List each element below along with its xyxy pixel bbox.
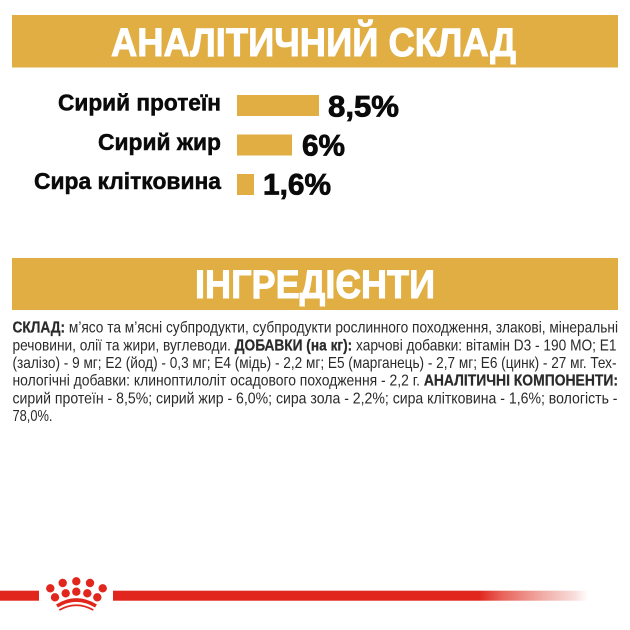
row: crude protein: 8,5%	[328, 90, 399, 124]
text block: ingredients list	[12, 320, 618, 425]
row: crude protein: Сирий протеїн	[58, 90, 221, 116]
title: analytical composition: АНАЛІТИЧНИЙ СКЛАД	[111, 19, 516, 65]
row: crude fibre: 1,6%	[263, 168, 331, 202]
title: ingredients: ІНГРЕДІЄНТИ	[195, 263, 435, 307]
text block: ingredients list: 78,0%.	[12, 408, 52, 425]
panel: analytical composition header	[12, 15, 618, 68]
bar chart: nutrient percentages	[34, 90, 399, 202]
icon: royal crown logo	[46, 577, 107, 610]
row: crude fibre: Сира клітковина	[34, 168, 221, 194]
footer band left	[0, 591, 39, 601]
row: crude fat: Сирий жир	[98, 129, 221, 155]
row: crude fat: 6%	[302, 130, 345, 162]
row: crude protein	[58, 90, 399, 124]
row: crude fibre	[34, 168, 331, 202]
panel: ingredients header	[12, 258, 618, 310]
footer band right with fade	[113, 591, 588, 601]
text block: ingredients list: нологічні добавки: клиноптилоліт осадового походження - 2,2 г. АНАЛІТИЧНІ КОМПОНЕНТИ:	[12, 372, 618, 390]
row: crude fat	[98, 129, 345, 162]
